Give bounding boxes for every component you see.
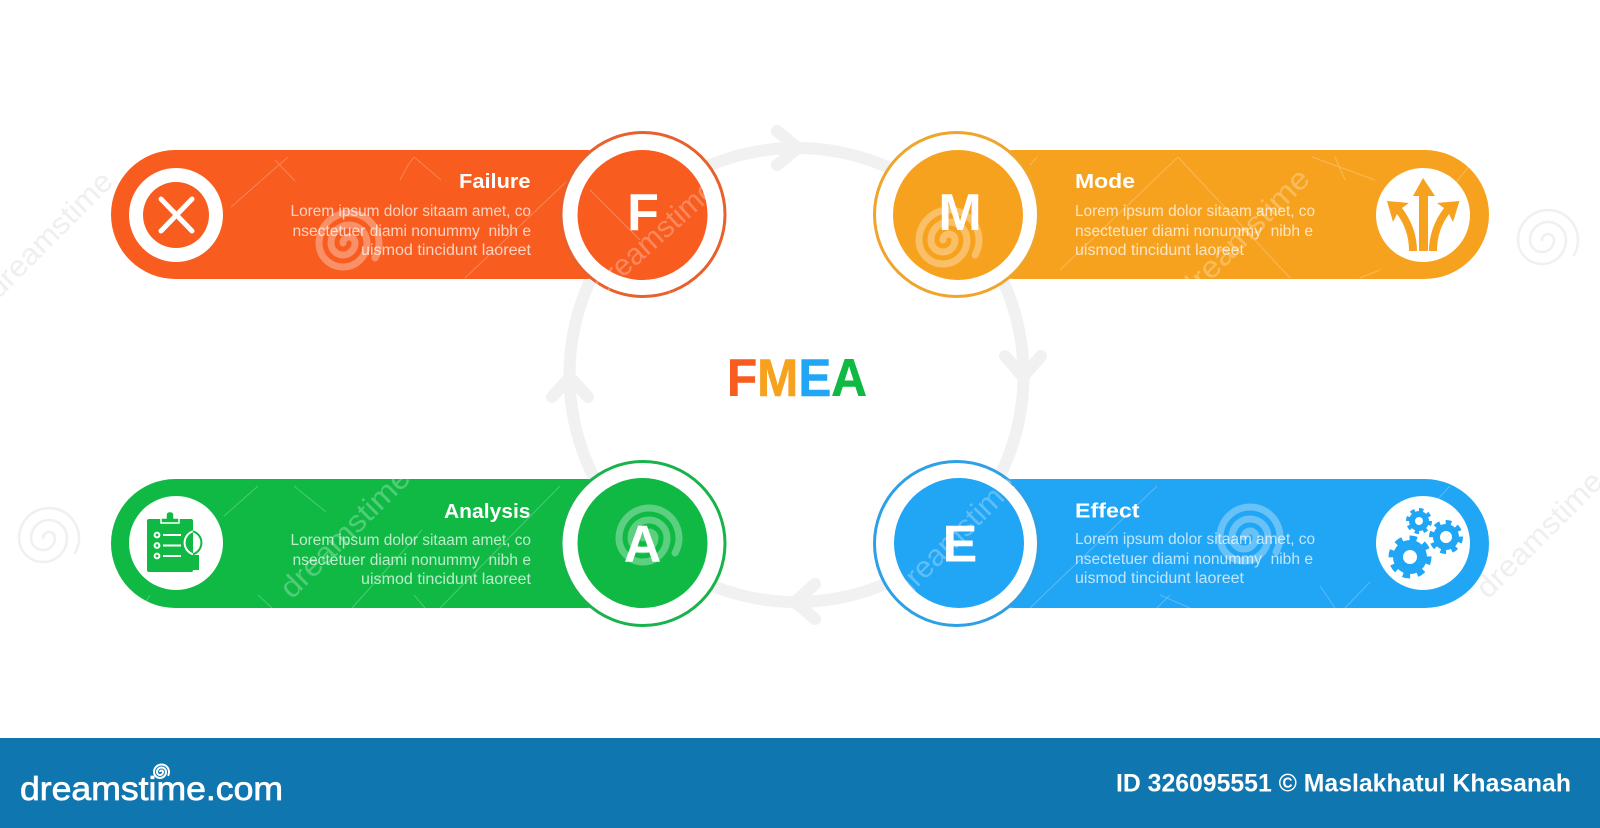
watermarks on white background xyxy=(0,165,1600,605)
text block: Failure: nsectetuer diami nonummy nibh e xyxy=(292,223,531,240)
watermark lines xyxy=(1030,157,1470,278)
watermark spiral xyxy=(1220,507,1280,561)
text block: Effect: Lorem ipsum dolor sitaam amet, co xyxy=(1075,531,1315,548)
icon: diverging arrows xyxy=(1376,168,1470,262)
icon: clipboard with magnifier xyxy=(129,496,223,590)
badge: E: E xyxy=(943,516,977,574)
badge: A xyxy=(561,462,725,626)
heading: Mode: Mode xyxy=(1075,171,1135,193)
text block: Analysis: uismod tincidunt laoreet xyxy=(361,571,532,588)
panel: Mode xyxy=(874,132,1489,307)
badge: F: F xyxy=(627,184,659,242)
heading: Failure: Failure xyxy=(459,171,530,193)
text block: Mode: uismod tincidunt laoreet xyxy=(1075,242,1245,259)
badge: F xyxy=(561,132,725,305)
badge: E: dreamstime xyxy=(887,468,1023,605)
icon: gears xyxy=(1376,496,1470,590)
watermark text: dreamstime xyxy=(1172,162,1317,307)
watermark lines xyxy=(142,486,560,608)
bar: Analysis xyxy=(111,479,651,608)
text block: Analysis: Lorem ipsum dolor sitaam amet, co xyxy=(290,532,531,549)
panel: Effect xyxy=(874,462,1489,626)
panel: Analysis xyxy=(111,461,725,626)
footer logo spiral xyxy=(154,765,169,778)
footer credit: ID 326095551 © Maslakhatul Khasanah xyxy=(1116,770,1571,798)
bar: Failure xyxy=(111,150,651,279)
icon: failure cross xyxy=(129,168,223,262)
badge: F: dreamstime xyxy=(586,173,723,301)
text block: Mode: nsectetuer diami nonummy nibh e xyxy=(1075,223,1313,240)
bar: Mode xyxy=(950,150,1489,279)
heading: Analysis: Analysis xyxy=(444,501,530,523)
badge: A: A xyxy=(624,516,661,574)
watermarks on white background: dreamstime xyxy=(1470,465,1600,605)
text block: Failure: Lorem ipsum dolor sitaam amet, co xyxy=(290,203,531,220)
cycle ring with arrows xyxy=(552,131,1041,619)
badge: E xyxy=(874,462,1038,626)
watermark spiral xyxy=(319,213,379,267)
panel: Failure xyxy=(111,132,725,305)
center title FMEA: FMEA xyxy=(727,349,867,408)
text block: Effect: nsectetuer diami nonummy nibh e xyxy=(1075,551,1313,568)
footer logo text: dreamstime.com xyxy=(20,770,283,807)
footer bar xyxy=(0,738,1600,828)
text block: Effect: uismod tincidunt laoreet xyxy=(1075,570,1245,587)
text block: Failure: uismod tincidunt laoreet xyxy=(361,242,532,259)
badge: M: M xyxy=(938,184,982,242)
watermark text: dreamstime xyxy=(274,461,417,605)
heading: Effect: Effect xyxy=(1075,500,1140,522)
text block: Analysis: nsectetuer diami nonummy nibh e xyxy=(292,552,531,569)
bar: Effect xyxy=(950,479,1489,608)
watermark lines xyxy=(1030,486,1450,608)
watermark lines xyxy=(150,157,568,278)
badge: M xyxy=(874,132,1038,296)
text block: Mode: Lorem ipsum dolor sitaam amet, co xyxy=(1075,203,1315,220)
